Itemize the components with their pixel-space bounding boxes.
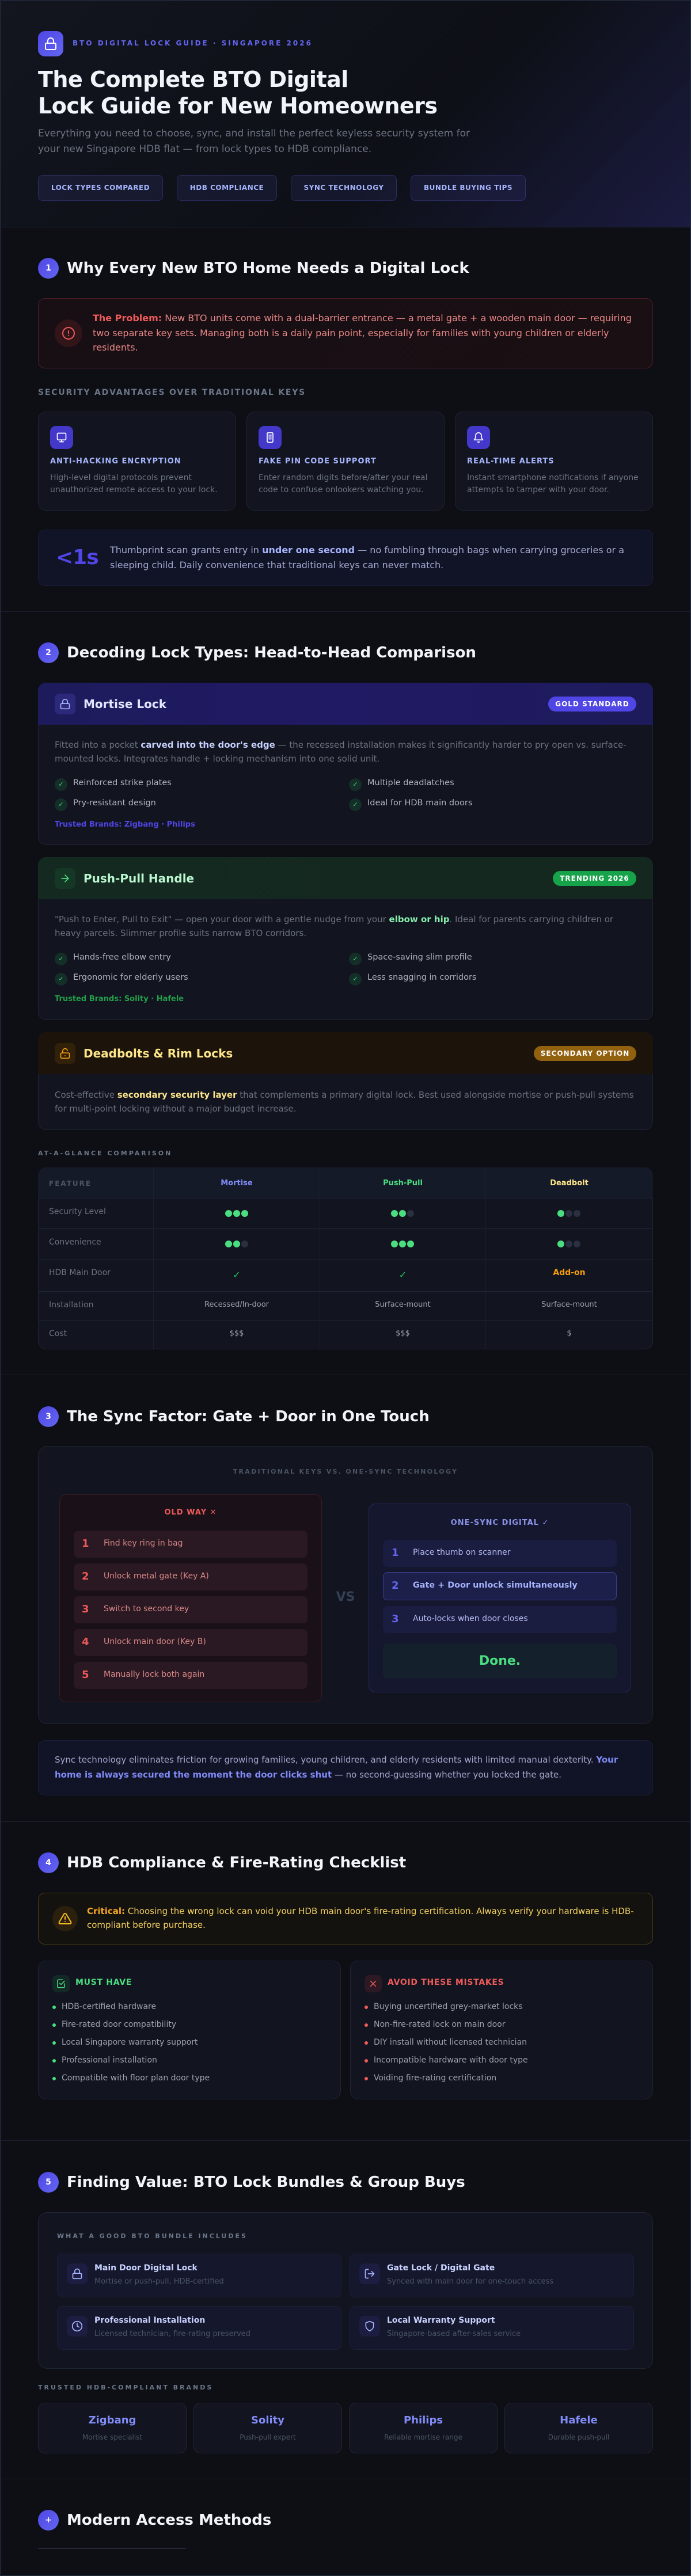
check icon: ✓ bbox=[58, 955, 64, 962]
brand note: Mortise specialist bbox=[82, 2433, 142, 2441]
warning text: compliant before purchase. bbox=[87, 1920, 206, 1930]
description bbox=[55, 914, 613, 938]
step 3: Auto-locks when door closes bbox=[413, 1614, 528, 1623]
step 4: 4 bbox=[82, 1636, 89, 1648]
description: for multi-point locking without a major budget increase. bbox=[55, 1104, 297, 1114]
feature: Pry-resistant design bbox=[73, 798, 156, 808]
card text: High-level digital protocols prevent bbox=[50, 473, 192, 482]
item: Incompatible hardware with door type bbox=[374, 2056, 528, 2065]
section number bbox=[38, 2510, 59, 2531]
item title: Main Door Digital Lock bbox=[94, 2263, 198, 2273]
rating: mortise bbox=[225, 1241, 248, 1247]
bullet bbox=[52, 2077, 56, 2080]
badge: GOLD STANDARD bbox=[555, 700, 629, 708]
step 2: Gate + Door unlock simultaneously bbox=[413, 1581, 578, 1590]
check icon: ✓ bbox=[58, 975, 64, 983]
icon: arrow bbox=[55, 868, 75, 889]
header bbox=[0, 0, 691, 227]
card title: Push-Pull Handle bbox=[83, 872, 194, 885]
brand note: Push-pull expert bbox=[240, 2433, 296, 2441]
section number bbox=[38, 258, 59, 279]
item: Non-fire-rated lock on main door bbox=[374, 2020, 505, 2029]
tag: SYNC TECHNOLOGY bbox=[303, 184, 384, 192]
row label: Convenience bbox=[49, 1238, 101, 1247]
check icon: ✓ bbox=[352, 975, 358, 983]
icon: padlock badge bbox=[38, 31, 63, 56]
step 2 bbox=[383, 1572, 617, 1600]
section title: Why Every New BTO Home Needs a Digital Lock bbox=[67, 260, 469, 277]
card title: Mortise Lock bbox=[83, 697, 166, 711]
section number: 3 bbox=[45, 1412, 51, 1421]
rating: deadbolt bbox=[557, 1241, 580, 1247]
description: mounted locks. Integrates handle + locking mechanism into one solid unit. bbox=[55, 754, 379, 764]
column: deadbolt: Deadbolt bbox=[550, 1179, 589, 1188]
subtitle bbox=[38, 128, 470, 155]
feature: Hands-free elbow entry bbox=[73, 953, 171, 962]
stat callout bbox=[38, 530, 653, 586]
eyebrow: BTO DIGITAL LOCK GUIDE · SINGAPORE 2026 bbox=[73, 39, 313, 47]
card header bbox=[38, 683, 653, 725]
icon: x mark bbox=[365, 1975, 382, 1992]
row label: Cost bbox=[49, 1329, 67, 1338]
check icon bbox=[55, 778, 67, 791]
done banner bbox=[383, 1643, 617, 1679]
section 3 heading bbox=[38, 1406, 430, 1427]
item: HDB-certified hardware bbox=[62, 2002, 156, 2011]
step 5 bbox=[74, 1662, 307, 1689]
item: Voiding fire-rating certification bbox=[374, 2073, 496, 2083]
step 2 bbox=[74, 1563, 307, 1591]
panel: sync comparison bbox=[38, 1446, 653, 1724]
section number bbox=[38, 2172, 59, 2193]
item title: Local Warranty Support bbox=[387, 2316, 495, 2325]
trusted brands: Trusted Brands: Zigbang · Philips bbox=[55, 820, 195, 829]
item text: Synced with main door for one-touch access bbox=[387, 2277, 553, 2286]
row label: Security Level bbox=[49, 1207, 106, 1216]
old way heading: OLD WAY ✕ bbox=[164, 1508, 217, 1517]
item text: Licensed technician, fire-rating preserved bbox=[94, 2330, 250, 2338]
row: installation bbox=[38, 1291, 653, 1320]
description bbox=[55, 740, 627, 764]
section number: + bbox=[45, 2516, 52, 2525]
item text: Mortise or push-pull, HDB-certified bbox=[94, 2277, 224, 2286]
step 3: Switch to second key bbox=[104, 1604, 189, 1614]
section number: 5 bbox=[45, 2178, 51, 2187]
item title: Gate Lock / Digital Gate bbox=[387, 2263, 495, 2273]
feature: Reinforced strike plates bbox=[73, 778, 172, 787]
title bbox=[38, 67, 438, 119]
card: mortise lock bbox=[38, 683, 653, 845]
tag bbox=[411, 175, 526, 201]
feature: Ergonomic for elderly users bbox=[73, 973, 188, 982]
panel: avoid mistakes bbox=[350, 1961, 653, 2099]
tag bbox=[177, 175, 277, 201]
done banner: Done. bbox=[479, 1654, 521, 1668]
check icon bbox=[55, 953, 67, 965]
brand name: Hafele bbox=[560, 2414, 598, 2426]
item: Fire-rated door compatibility bbox=[62, 2020, 176, 2029]
step 4: Unlock main door (Key B) bbox=[104, 1637, 206, 1646]
check icon bbox=[349, 798, 362, 811]
icon: check square bbox=[52, 1975, 70, 1992]
bundle item bbox=[57, 2306, 341, 2350]
icon: open lock bbox=[55, 1043, 75, 1064]
feature checklist bbox=[55, 953, 477, 985]
card text bbox=[467, 473, 639, 494]
stat value: <1s bbox=[56, 546, 98, 569]
rating: push-pull bbox=[391, 1210, 414, 1217]
tag: HDB COMPLIANCE bbox=[190, 184, 264, 192]
tag bbox=[38, 175, 163, 201]
card text: code to confuse onlookers watching you. bbox=[259, 485, 424, 494]
icon: lock bbox=[67, 2263, 88, 2284]
rating: mortise bbox=[225, 1210, 248, 1217]
bundle item bbox=[350, 2306, 634, 2350]
step 4 bbox=[74, 1629, 307, 1656]
step 1 bbox=[383, 1540, 617, 1567]
callout: critical warning bbox=[38, 1893, 653, 1945]
section number: 4 bbox=[45, 1858, 51, 1867]
step 1: 1 bbox=[82, 1538, 89, 1550]
feature checklist bbox=[55, 778, 472, 811]
panel title: AVOID THESE MISTAKES bbox=[388, 1978, 504, 1987]
explanation text: Sync technology eliminates friction for growing families, young children, and elderly residents with limited manual dexterity. Your bbox=[55, 1755, 618, 1765]
card text: Enter random digits before/after your real bbox=[259, 473, 427, 482]
card header bbox=[38, 1032, 653, 1074]
value: push-pull: ✓ bbox=[399, 1269, 407, 1280]
card: real-time alerts bbox=[455, 412, 653, 511]
icon: shield bbox=[359, 2316, 380, 2337]
value: push-pull: $$$ bbox=[396, 1329, 410, 1338]
card text: attempts to tamper with your door. bbox=[467, 485, 609, 494]
step 3 bbox=[383, 1606, 617, 1633]
brand name: Zigbang bbox=[89, 2414, 136, 2426]
description: Fitted into a pocket carved into the door's edge — the recessed installation makes it significantly harder to pry open vs. surface- bbox=[55, 740, 627, 750]
clipped card edge bbox=[38, 2548, 186, 2549]
badge: SECONDARY OPTION bbox=[541, 1049, 629, 1057]
section title: Finding Value: BTO Lock Bundles & Group Buys bbox=[67, 2174, 465, 2191]
step 3: 3 bbox=[82, 1603, 89, 1615]
brand card bbox=[193, 2403, 342, 2453]
tag: BUNDLE BUYING TIPS bbox=[424, 184, 512, 192]
section 5 heading bbox=[38, 2172, 465, 2193]
item: Local Singapore warranty support bbox=[62, 2038, 198, 2047]
bullet bbox=[365, 2077, 368, 2080]
mistakes list bbox=[365, 2002, 528, 2083]
problem text: The Problem: New BTO units come with a dual-barrier entrance — a metal gate + a wooden main door — requiring bbox=[93, 313, 632, 324]
check icon: ✓ bbox=[58, 801, 64, 808]
feature: Ideal for HDB main doors bbox=[367, 798, 472, 808]
stat text: sleeping child. Daily convenience that traditional keys can never match. bbox=[110, 560, 443, 570]
row: convenience bbox=[38, 1228, 653, 1259]
bullet bbox=[365, 2006, 368, 2009]
icon: exit door bbox=[359, 2263, 380, 2284]
subtitle: your new Singapore HDB flat — from lock types to HDB compliance. bbox=[38, 143, 371, 155]
table header row bbox=[38, 1167, 653, 1198]
step 2: 2 bbox=[82, 1570, 89, 1582]
card: fake pin bbox=[246, 412, 445, 511]
check icon bbox=[349, 973, 362, 985]
brand note: Reliable mortise range bbox=[384, 2433, 462, 2441]
bullet bbox=[365, 2041, 368, 2045]
icon: monitor bbox=[50, 426, 73, 449]
value: push-pull: Surface-mount bbox=[375, 1300, 431, 1309]
check icon bbox=[55, 798, 67, 811]
check icon bbox=[55, 973, 67, 985]
brand card bbox=[504, 2403, 653, 2453]
panel heading: WHAT A GOOD BTO BUNDLE INCLUDES bbox=[57, 2232, 248, 2240]
value: mortise: $$$ bbox=[230, 1329, 244, 1338]
value: mortise: ✓ bbox=[233, 1269, 241, 1280]
description: Cost-effective secondary security layer that complements a primary digital lock. Best used alongside mortise or push-pull systems bbox=[55, 1090, 634, 1100]
card text bbox=[259, 473, 427, 494]
icon: warning triangle bbox=[52, 1906, 78, 1931]
check icon: ✓ bbox=[352, 781, 358, 788]
explanation text bbox=[55, 1755, 618, 1780]
rating: deadbolt bbox=[557, 1210, 580, 1217]
item: DIY install without licensed technician bbox=[374, 2038, 527, 2047]
heading: at-a-glance: AT-A-GLANCE COMPARISON bbox=[38, 1150, 172, 1157]
section title: The Sync Factor: Gate + Door in One Touch bbox=[67, 1408, 430, 1425]
section number bbox=[38, 642, 59, 663]
bundle item bbox=[57, 2254, 341, 2297]
description bbox=[55, 1090, 634, 1114]
step 1: Place thumb on scanner bbox=[413, 1548, 510, 1557]
section number bbox=[38, 1852, 59, 1873]
panel: must have bbox=[38, 1961, 341, 2099]
problem text bbox=[93, 313, 632, 353]
row label: Installation bbox=[49, 1300, 94, 1310]
icon: alert circle bbox=[55, 319, 82, 347]
row label: HDB Main Door bbox=[49, 1268, 111, 1277]
description: "Push to Enter, Pull to Exit" — open your door with a gentle nudge from your elbow or hip. Ideal for parents carrying children or bbox=[55, 914, 613, 924]
explanation text: home is always secured the moment the door clicks shut — no second-guessing whether you locked the gate. bbox=[55, 1770, 561, 1780]
item: Compatible with floor plan door type bbox=[62, 2073, 210, 2083]
bullet bbox=[52, 2059, 56, 2063]
column: push-pull: Push-Pull bbox=[383, 1179, 423, 1188]
brand card bbox=[349, 2403, 498, 2453]
section 6 heading bbox=[38, 2510, 271, 2531]
feature: Space-saving slim profile bbox=[367, 953, 472, 962]
panel: one-sync bbox=[369, 1504, 631, 1692]
value: mortise: Recessed/In-door bbox=[204, 1300, 269, 1309]
checklist bbox=[52, 2002, 210, 2083]
card: deadbolts bbox=[38, 1032, 653, 1130]
icon: lock bbox=[55, 694, 75, 714]
bullet bbox=[52, 2041, 56, 2045]
callout: the problem bbox=[38, 298, 653, 368]
description: heavy parcels. Slimmer profile suits narrow BTO corridors. bbox=[55, 928, 306, 938]
heading: trusted brands: TRUSTED HDB-COMPLIANT BRANDS bbox=[38, 2384, 213, 2391]
section title: Decoding Lock Types: Head-to-Head Comparison bbox=[67, 644, 476, 661]
one-sync heading: ONE-SYNC DIGITAL ✓ bbox=[451, 1519, 549, 1527]
section title: HDB Compliance & Fire-Rating Checklist bbox=[67, 1854, 406, 1871]
brand name: Philips bbox=[404, 2414, 443, 2426]
bullet bbox=[365, 2023, 368, 2027]
brand name: Solity bbox=[251, 2414, 284, 2426]
step 2: 2 bbox=[392, 1580, 399, 1592]
icon: phone bbox=[259, 426, 282, 449]
icon: clock bbox=[67, 2316, 88, 2337]
panel heading: TRADITIONAL KEYS VS. ONE-SYNC TECHNOLOGY bbox=[233, 1468, 458, 1475]
check icon bbox=[349, 953, 362, 965]
card text: Instant smartphone notifications if anyone bbox=[467, 473, 639, 482]
check icon bbox=[349, 778, 362, 791]
panel title: MUST HAVE bbox=[75, 1978, 132, 1987]
card: anti-hacking bbox=[38, 412, 236, 511]
brand note: Durable push-pull bbox=[548, 2433, 609, 2441]
row: security level bbox=[38, 1198, 653, 1228]
step 2: Unlock metal gate (Key A) bbox=[104, 1572, 209, 1581]
feature: Less snagging in corridors bbox=[367, 973, 477, 982]
brand card bbox=[38, 2403, 187, 2453]
item title: Professional Installation bbox=[94, 2316, 205, 2325]
step 5: Manually lock both again bbox=[104, 1670, 204, 1679]
stat text: Thumbprint scan grants entry in under one second — no fumbling through bags when carrying groceries or a bbox=[110, 545, 624, 555]
item: Buying uncertified grey-market locks bbox=[374, 2002, 523, 2011]
feature: Multiple deadlatches bbox=[367, 778, 454, 787]
section 2 heading bbox=[38, 642, 476, 663]
check icon: ✓ bbox=[352, 801, 358, 808]
column: mortise: Mortise bbox=[221, 1179, 253, 1188]
column: feature: FEATURE bbox=[49, 1179, 92, 1188]
tag bbox=[291, 175, 397, 201]
title: The Complete BTO Digital bbox=[38, 67, 348, 92]
vs label: VS bbox=[336, 1590, 355, 1604]
sync explanation bbox=[38, 1740, 653, 1795]
stat text bbox=[109, 545, 624, 570]
step 1: Find key ring in bag bbox=[104, 1539, 183, 1548]
row: hdb main door bbox=[38, 1259, 653, 1291]
badge: TRENDING 2026 bbox=[560, 874, 629, 882]
tag: LOCK TYPES COMPARED bbox=[51, 184, 150, 192]
bundle item bbox=[350, 2254, 634, 2297]
title: Lock Guide for New Homeowners bbox=[38, 93, 438, 119]
step 5: 5 bbox=[82, 1669, 89, 1681]
value: deadbolt: $ bbox=[567, 1329, 572, 1338]
card title: ANTI-HACKING ENCRYPTION bbox=[50, 457, 181, 466]
panel: bundle contents bbox=[38, 2212, 653, 2369]
comparison table bbox=[38, 1167, 653, 1349]
check icon: ✓ bbox=[352, 955, 358, 962]
bullet bbox=[52, 2006, 56, 2009]
section number: 2 bbox=[45, 648, 51, 657]
item text: Singapore-based after-sales service bbox=[387, 2330, 521, 2338]
card title: Deadbolts & Rim Locks bbox=[83, 1047, 233, 1060]
bullet bbox=[52, 2023, 56, 2027]
badge bbox=[534, 1046, 636, 1061]
badge bbox=[553, 871, 636, 886]
card title: FAKE PIN CODE SUPPORT bbox=[259, 457, 377, 466]
row: cost bbox=[38, 1320, 653, 1349]
step 3: 3 bbox=[392, 1613, 399, 1625]
warning text: Critical: Choosing the wrong lock can void your HDB main door's fire-rating certification. Always verify your hardware is HDB- bbox=[87, 1906, 634, 1916]
section number: 1 bbox=[45, 264, 51, 273]
subtitle: Everything you need to choose, sync, and install the perfect keyless security system for bbox=[38, 128, 470, 139]
check icon: ✓ bbox=[58, 781, 64, 788]
step 1 bbox=[74, 1531, 307, 1558]
warning text bbox=[87, 1906, 634, 1930]
icon: bell bbox=[467, 426, 490, 449]
step 3 bbox=[74, 1596, 307, 1623]
step 1: 1 bbox=[392, 1547, 399, 1559]
card text bbox=[50, 473, 218, 494]
card header bbox=[38, 857, 653, 899]
problem text: residents. bbox=[93, 342, 138, 353]
badge bbox=[548, 697, 636, 711]
section 1 heading bbox=[38, 258, 470, 279]
card: push-pull handle bbox=[38, 857, 653, 1020]
item: Professional installation bbox=[62, 2056, 157, 2065]
section 4 heading bbox=[38, 1852, 406, 1873]
heading: security advantages: SECURITY ADVANTAGES OVER TRADITIONAL KEYS bbox=[38, 388, 306, 397]
card title: REAL-TIME ALERTS bbox=[467, 457, 555, 466]
section title: Modern Access Methods bbox=[67, 2512, 271, 2529]
section number bbox=[38, 1406, 59, 1427]
value: deadbolt: Add-on bbox=[553, 1268, 586, 1277]
bullet bbox=[365, 2059, 368, 2063]
problem text: two separate key sets. Managing both is a daily pain point, especially for families with young children or elderly bbox=[93, 327, 609, 338]
panel: old way bbox=[59, 1494, 322, 1702]
rating: push-pull bbox=[391, 1241, 414, 1247]
trusted brands: Trusted Brands: Solity · Hafele bbox=[55, 995, 184, 1003]
value: deadbolt: Surface-mount bbox=[541, 1300, 597, 1309]
card text: unauthorized remote access to your lock. bbox=[50, 485, 218, 494]
